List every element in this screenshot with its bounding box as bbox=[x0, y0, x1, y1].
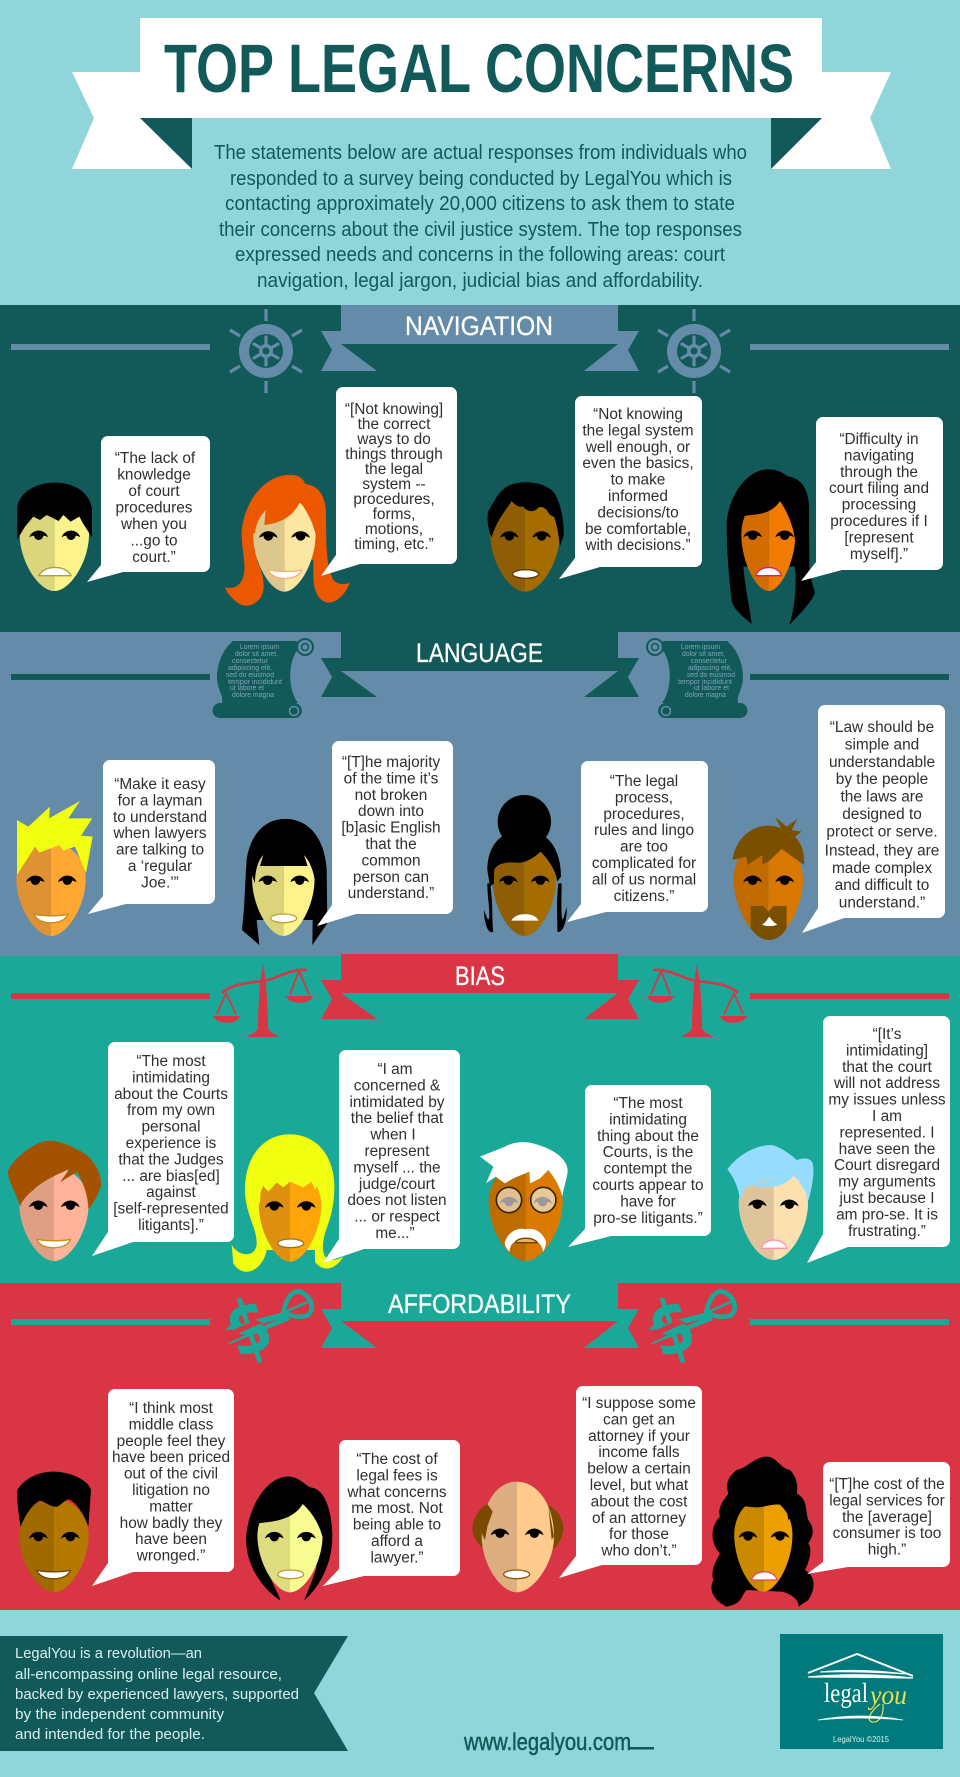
person: bearded man bbox=[733, 817, 804, 940]
bubble: it's intimidating: frustrating.” bbox=[848, 1223, 926, 1240]
website url: www.legalyou.com bbox=[463, 1729, 631, 1756]
bubble: make it easy: a ‘regular bbox=[128, 858, 192, 875]
logo: LegalYou ©2015 bbox=[833, 1734, 889, 1744]
bubble: difficulty in navigating: procedures if I bbox=[830, 513, 928, 530]
bubble: make it easy: for a layman bbox=[118, 792, 202, 809]
icon: scroll left: Lorem ipsum bbox=[240, 644, 279, 651]
person: hair bun woman bbox=[484, 795, 567, 936]
bubble: contempt the courts appear: “The most bbox=[613, 1095, 683, 1112]
bubble: it's intimidating: will not address bbox=[833, 1075, 940, 1092]
icon: scroll right: Lorem ipsum bbox=[681, 644, 720, 651]
bubble: suppose some can get attorney: of an attorney bbox=[592, 1510, 686, 1527]
bubble: law should be simple: made complex bbox=[832, 860, 932, 877]
icon: ship wheel right bbox=[658, 309, 730, 393]
bubble: law should be simple: “Law should be bbox=[830, 719, 934, 736]
bubble: it's intimidating: I am bbox=[872, 1108, 902, 1125]
footer ribbon: by the independent community bbox=[15, 1706, 225, 1723]
bubble: concerned and intimidated: intimidated by bbox=[350, 1094, 445, 1111]
person: bald man bbox=[472, 1482, 563, 1592]
icon: scroll left bbox=[212, 639, 313, 718]
bubble: suppose some can get attorney: attorney if your bbox=[588, 1428, 690, 1445]
person: long black hair woman bbox=[727, 469, 815, 625]
footer ribbon: backed by experienced lawyers, supported bbox=[15, 1686, 299, 1703]
bubble: concerned and intimidated: does not listen bbox=[347, 1192, 447, 1209]
bubble: it's intimidating: “[It’s bbox=[873, 1026, 902, 1043]
logo: you bbox=[867, 1680, 907, 1710]
person: black bob woman bbox=[246, 1477, 332, 1601]
bubble: law should be simple: protect or serve. bbox=[826, 823, 938, 840]
bubble: difficulty in navigating: [represent bbox=[844, 529, 914, 546]
bubble: most intimidating about the courts: about the Courts bbox=[114, 1086, 228, 1103]
bubble: not knowing correct ways: ways to do bbox=[356, 431, 431, 448]
bubble: difficulty in navigating bbox=[801, 417, 943, 581]
bubble: not knowing correct ways: “[Not knowing] bbox=[345, 401, 443, 418]
bubble: concerned and intimidated: represent bbox=[364, 1143, 430, 1160]
icon: scroll right: tempor incididunt bbox=[678, 679, 732, 686]
icon: scroll left: ut labore et bbox=[230, 685, 264, 692]
bubble: contempt the courts appear: have for bbox=[620, 1193, 676, 1210]
bubble: it's intimidating: just because I bbox=[839, 1190, 934, 1207]
bubble: cost of legal fees: legal fees is bbox=[356, 1467, 438, 1484]
icon: scroll right: dolor sit amet, bbox=[682, 651, 725, 658]
person: curly hair woman bbox=[711, 1457, 814, 1607]
bubble: cost of legal fees: afford a bbox=[371, 1533, 423, 1550]
bubble: law should be simple: by the people bbox=[836, 771, 928, 788]
bubble: difficulty in navigating: “Difficulty in bbox=[839, 431, 919, 448]
affordability divider lines bbox=[11, 1319, 949, 1325]
bubble: middle class: wronged.” bbox=[136, 1548, 205, 1565]
person: brown man bbox=[488, 482, 564, 592]
bubble: not knowing correct ways bbox=[321, 387, 457, 576]
bubble: not knowing correct ways: timing, etc.” bbox=[354, 536, 434, 553]
panel: navigation bbox=[0, 305, 960, 632]
person: blonde woman bbox=[232, 1134, 343, 1272]
bubble: it's intimidating: am pro-se. It is bbox=[836, 1206, 938, 1223]
icon: ship wheel left bbox=[230, 309, 302, 393]
bubble: not knowing correct ways: motions, bbox=[365, 521, 423, 538]
icon: scroll left: sed do eiusmod bbox=[226, 672, 274, 679]
bubble: not knowing the legal system: informed bbox=[608, 488, 668, 505]
bubble: make it easy: Joe.’” bbox=[141, 874, 179, 891]
logo bbox=[780, 1634, 943, 1749]
bubble: contempt the courts appear: thing about the bbox=[597, 1128, 699, 1145]
bubble: law should be simple: simple and bbox=[845, 736, 919, 753]
bubble: middle class: how badly they bbox=[120, 1515, 223, 1532]
intro text bbox=[214, 142, 747, 292]
bubble: suppose some can get attorney: who don’t.” bbox=[600, 1543, 677, 1560]
bubble: cost of legal fees: what concerns bbox=[346, 1484, 447, 1501]
bubble: legal process: procedures, bbox=[603, 806, 685, 823]
bubble: not knowing the legal system: decisions/to bbox=[597, 504, 679, 521]
footer ribbon: and intended for the people. bbox=[15, 1726, 205, 1743]
bubble: cost of legal services: high.” bbox=[868, 1542, 906, 1559]
bubble: concerned and intimidated bbox=[323, 1050, 460, 1263]
bubble: middle class: out of the civil bbox=[124, 1466, 218, 1483]
bubble: it's intimidating: my arguments bbox=[838, 1174, 936, 1191]
bubble: difficulty in navigating: processing bbox=[842, 497, 916, 514]
bubble: lack of knowledge: when you bbox=[120, 516, 187, 533]
bubble: contempt the courts appear: courts appear to bbox=[592, 1177, 704, 1194]
bubble: majority of the time: of the time it’s bbox=[344, 770, 439, 787]
bubble: middle class: matter bbox=[149, 1498, 193, 1515]
bubble: legal process: “The legal bbox=[610, 773, 678, 790]
bubble: majority of the time: person can bbox=[353, 869, 429, 886]
heading ribbon: language: LANGUAGE bbox=[416, 638, 543, 668]
bubble: cost of legal fees: lawyer.” bbox=[370, 1549, 424, 1566]
person: black bangs woman bbox=[242, 819, 327, 945]
bubble: law should be simple: Instead, they are bbox=[825, 842, 939, 859]
bubble: cost of legal services: consumer is too bbox=[833, 1525, 941, 1542]
bubble: lack of knowledge: court.” bbox=[132, 549, 176, 566]
bubble: contempt the courts appear: pro-se litigants.” bbox=[593, 1210, 703, 1227]
icon: scroll left: adipiscing elit, bbox=[228, 665, 272, 672]
person: blue hair woman bbox=[727, 1145, 813, 1260]
bubble: suppose some can get attorney bbox=[559, 1386, 702, 1578]
bubble: not knowing the legal system: well enough, or bbox=[585, 439, 690, 456]
bubble: concerned and intimidated: ... or respect bbox=[354, 1209, 440, 1226]
icon: scroll left: tempor incididunt bbox=[228, 679, 282, 686]
icon: scales right bbox=[647, 964, 747, 1037]
logo: legal bbox=[824, 1678, 868, 1708]
bubble: most intimidating about the courts: experience is bbox=[126, 1135, 217, 1152]
panel: language bbox=[0, 632, 960, 956]
bubble: contempt the courts appear: Courts, is the bbox=[603, 1144, 693, 1161]
bubble: it's intimidating: that the court bbox=[842, 1059, 933, 1076]
bubble: legal process bbox=[567, 761, 708, 922]
bubble: most intimidating about the courts bbox=[92, 1042, 234, 1256]
bubble: make it easy bbox=[88, 760, 215, 914]
bubble: concerned and intimidated: the belief that bbox=[351, 1110, 444, 1127]
bubble: not knowing correct ways: things through bbox=[345, 446, 443, 463]
footer ribbon bbox=[0, 1636, 348, 1751]
bubble: make it easy: are talking to bbox=[116, 842, 204, 859]
bias divider lines bbox=[11, 993, 949, 999]
bubble: contempt the courts appear: contempt the bbox=[604, 1161, 692, 1178]
bubble: lack of knowledge: of court bbox=[128, 483, 180, 500]
bubble: concerned and intimidated: myself ... the bbox=[353, 1159, 441, 1176]
bubble: law should be simple: understand.” bbox=[839, 895, 925, 912]
bubble: not knowing correct ways: system -- bbox=[362, 476, 426, 493]
bubble: lack of knowledge: knowledge bbox=[117, 466, 191, 484]
bubble: lack of knowledge: procedures bbox=[116, 500, 193, 516]
person: black hair man bbox=[17, 483, 92, 591]
heading ribbon: navigation: NAVIGATION bbox=[405, 311, 553, 341]
bubble: majority of the time: “[T]he majority bbox=[342, 754, 440, 771]
bubble: it's intimidating: intimidating] bbox=[846, 1042, 928, 1059]
bubble: not knowing the legal system: to make bbox=[611, 472, 665, 489]
bubble: legal process: process, bbox=[615, 789, 673, 806]
person: red hair woman bbox=[225, 475, 350, 606]
icon: scroll left: dolore magna bbox=[232, 692, 274, 699]
intro text: contacting approximately 20,000 citizens to ask them to state bbox=[225, 193, 735, 215]
bubble: cost of legal services bbox=[807, 1462, 950, 1574]
icon: scroll right bbox=[647, 639, 748, 718]
bubble: make it easy: “Make it easy bbox=[114, 776, 206, 793]
bubble: it's intimidating: my issues unless bbox=[828, 1092, 946, 1109]
bubble: law should be simple: understandable bbox=[829, 754, 935, 771]
bubble: middle class: middle class bbox=[129, 1416, 214, 1433]
bubble: cost of legal fees bbox=[323, 1440, 460, 1586]
intro text: The statements below are actual responses from individuals who bbox=[214, 142, 747, 164]
title banner: TOP LEGAL CONCERNS bbox=[164, 30, 794, 107]
bubble: most intimidating about the courts: “The most bbox=[136, 1053, 206, 1070]
bubble: most intimidating about the courts: litigants].” bbox=[138, 1217, 204, 1234]
icon: scroll right: consectetur bbox=[691, 658, 728, 665]
bubble: difficulty in navigating: court filing and bbox=[829, 480, 929, 497]
bubble: most intimidating about the courts: ... are bias[ed] bbox=[122, 1168, 220, 1185]
bubble: majority of the time: understand.” bbox=[348, 885, 434, 902]
bubble: suppose some can get attorney: “I suppose some bbox=[582, 1395, 696, 1412]
bubble: majority of the time bbox=[317, 741, 453, 926]
bubble: cost of legal fees: “The cost of bbox=[356, 1451, 438, 1468]
bubble: legal process: complicated for bbox=[592, 855, 696, 872]
bubble: middle class: people feel they bbox=[117, 1433, 226, 1450]
intro text: expressed needs and concerns in the following areas: court bbox=[235, 244, 725, 266]
bubble: concerned and intimidated: judge/court bbox=[358, 1176, 436, 1193]
bubble: law should be simple: designed to bbox=[842, 806, 922, 823]
bubble: suppose some can get attorney: level, but what bbox=[590, 1477, 689, 1494]
person: brown man widow's peak bbox=[17, 1472, 91, 1592]
bubble: not knowing correct ways: the legal bbox=[365, 461, 423, 478]
bubble: not knowing the legal system: even the basics, bbox=[582, 455, 694, 472]
bubble: not knowing the legal system: be comfortable, bbox=[585, 521, 691, 538]
heading ribbon: affordability: AFFORDABILITY bbox=[388, 1289, 571, 1319]
bubble: make it easy: when lawyers bbox=[112, 825, 207, 842]
intro text: their concerns about the civil justice system. The top responses bbox=[219, 219, 742, 241]
icon: scroll right: adipiscing elit, bbox=[688, 665, 732, 672]
icon: dollar scissors left bbox=[216, 1281, 312, 1376]
bubble: it's intimidating: Court disregard bbox=[834, 1157, 940, 1174]
bubble: middle class: litigation no bbox=[132, 1482, 210, 1499]
bubble: lack of knowledge: ...go to bbox=[130, 532, 178, 550]
bubble: it's intimidating: represented. I bbox=[840, 1124, 934, 1141]
bubble: lack of knowledge bbox=[87, 436, 210, 582]
bubble: legal process: all of us normal bbox=[592, 871, 696, 888]
icon: dollar scissors left: $ bbox=[216, 1281, 282, 1376]
bubble: not knowing the legal system: “Not knowing bbox=[593, 406, 683, 423]
bubble: not knowing the legal system bbox=[559, 396, 702, 579]
bubble: suppose some can get attorney: below a certain bbox=[587, 1461, 691, 1478]
icon: dollar scissors right: $ bbox=[639, 1281, 705, 1376]
person: glasses old man bbox=[480, 1142, 568, 1261]
bubble: suppose some can get attorney: income falls bbox=[598, 1444, 680, 1461]
nav divider lines bbox=[11, 344, 949, 350]
bubble: concerned and intimidated: me...” bbox=[375, 1225, 415, 1242]
bubble: majority of the time: [b]asic English bbox=[341, 820, 441, 837]
bubble: make it easy: to understand bbox=[113, 809, 207, 826]
bubble: difficulty in navigating: navigating bbox=[844, 447, 914, 464]
bubble: not knowing the legal system: with decisions.” bbox=[584, 537, 691, 554]
intro text: responded to a survey being conducted by LegalYou which is bbox=[230, 168, 732, 190]
heading ribbon: bias bbox=[321, 954, 639, 1019]
bubble: majority of the time: down into bbox=[358, 803, 424, 820]
bubble: most intimidating about the courts: that the Judges bbox=[118, 1151, 224, 1168]
footer ribbon: LegalYou is a revolution—an bbox=[15, 1645, 202, 1662]
bubble: most intimidating about the courts: intimidating bbox=[132, 1069, 210, 1086]
heading ribbon: language bbox=[321, 632, 639, 697]
bubble: difficulty in navigating: through the bbox=[840, 464, 918, 481]
icon: scales left bbox=[213, 964, 313, 1037]
heading ribbon: affordability bbox=[321, 1283, 639, 1348]
bubble: lack of knowledge: “The lack of bbox=[115, 450, 196, 467]
bubble: difficulty in navigating: myself].” bbox=[850, 546, 908, 563]
bubble: law should be simple: and difficult to bbox=[835, 877, 929, 894]
panel: bias bbox=[0, 954, 960, 1283]
footer ribbon: all-encompassing online legal resource, bbox=[15, 1666, 282, 1683]
heading ribbon: navigation bbox=[321, 305, 639, 371]
bubble: concerned and intimidated: concerned & bbox=[354, 1077, 441, 1094]
icon: scroll right: ut labore et bbox=[694, 685, 729, 692]
bubble: majority of the time: that the bbox=[365, 836, 417, 853]
bubble: it's intimidating: have seen the bbox=[839, 1141, 935, 1158]
bubble: most intimidating about the courts: [self-represented bbox=[113, 1201, 229, 1218]
person: spiky yellow hair man bbox=[16, 801, 93, 936]
bubble: law should be simple bbox=[802, 705, 945, 933]
bubble: majority of the time: not broken bbox=[355, 787, 427, 804]
panel: affordability bbox=[0, 1281, 960, 1610]
bubble: law should be simple: the laws are bbox=[841, 789, 923, 806]
bubble: middle class: have been bbox=[135, 1531, 207, 1548]
icon: scroll left: consectetur bbox=[232, 658, 269, 665]
heading ribbon: bias: BIAS bbox=[455, 961, 505, 991]
bubble: middle class bbox=[92, 1389, 234, 1586]
person: auburn hair woman bbox=[8, 1141, 101, 1261]
intro text: navigation, legal jargon, judicial bias and affordability. bbox=[257, 270, 703, 292]
bubble: concerned and intimidated: “I am bbox=[377, 1061, 413, 1078]
title banner bbox=[72, 18, 891, 169]
bubble: legal process: are too bbox=[620, 839, 668, 856]
bubble: most intimidating about the courts: personal bbox=[141, 1119, 201, 1136]
icon: scroll right: dolore magna bbox=[685, 692, 726, 699]
bubble: suppose some can get attorney: for those bbox=[609, 1526, 669, 1543]
bubble: concerned and intimidated: when I bbox=[369, 1127, 416, 1144]
bubble: contempt the courts appear: intimidating bbox=[609, 1111, 687, 1128]
bubble: cost of legal fees: being able to bbox=[353, 1517, 441, 1534]
bubble: cost of legal services: the [average] bbox=[842, 1509, 932, 1526]
bubble: cost of legal fees: me most. Not bbox=[351, 1500, 443, 1517]
bubble: middle class: have been priced bbox=[112, 1449, 230, 1466]
bubble: not knowing correct ways: procedures, bbox=[353, 491, 435, 508]
bubble: legal process: citizens.” bbox=[614, 888, 674, 905]
bubble: not knowing the legal system: the legal system bbox=[582, 422, 694, 439]
bubble: suppose some can get attorney: about the cost bbox=[591, 1493, 688, 1510]
icon: scroll right: sed do eiusmod bbox=[687, 672, 735, 679]
bubble: cost of legal services: “[T]he cost of the bbox=[829, 1476, 945, 1493]
bubble: legal process: rules and lingo bbox=[594, 822, 694, 839]
bubble: not knowing correct ways: the correct bbox=[358, 416, 431, 433]
bubble: middle class: “I think most bbox=[129, 1400, 214, 1417]
icon: dollar scissors right bbox=[639, 1281, 735, 1376]
bubble: contempt the courts appear bbox=[568, 1085, 711, 1247]
bubble: suppose some can get attorney: can get an bbox=[603, 1411, 675, 1428]
bubble: most intimidating about the courts: against bbox=[146, 1184, 197, 1201]
bubble: it's intimidating bbox=[807, 1016, 950, 1263]
icon: scroll left: dolor sit amet, bbox=[235, 651, 278, 658]
language divider lines bbox=[11, 674, 949, 680]
bubble: most intimidating about the courts: from my own bbox=[127, 1102, 215, 1119]
bubble: majority of the time: common bbox=[361, 852, 421, 869]
bubble: not knowing correct ways: forms, bbox=[373, 506, 415, 523]
bubble: cost of legal services: legal services for bbox=[829, 1492, 945, 1509]
